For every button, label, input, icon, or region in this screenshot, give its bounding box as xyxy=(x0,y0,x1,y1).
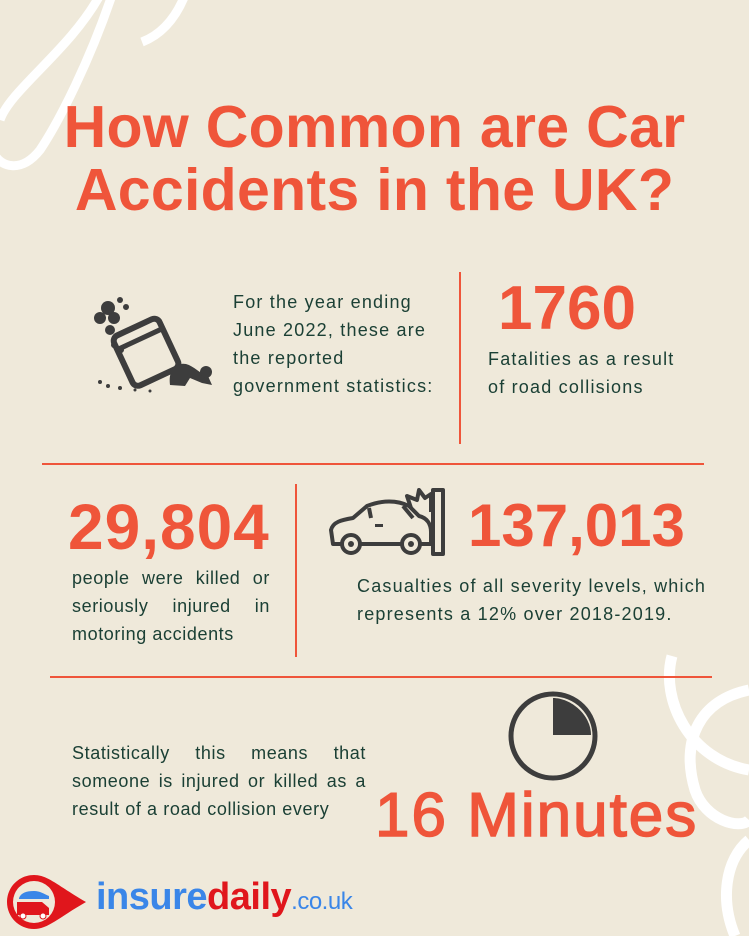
icon: car crashing into wall xyxy=(329,488,445,556)
stat: 29,804 KSI: seriously injured in xyxy=(72,596,270,616)
stat: 29,804 KSI: motoring accidents xyxy=(72,624,234,644)
text: statistically: Statistically this means that xyxy=(72,743,366,763)
text: statistically: someone is injured or killed as a xyxy=(72,771,366,791)
logo: insuredaily: insuredaily.co.uk xyxy=(96,876,352,918)
text: casualties: Casualties of all severity levels, which xyxy=(357,576,706,596)
text: intro xyxy=(233,292,433,396)
stat: 29,804 KSI: 29,804 xyxy=(68,491,270,563)
stat: 1760 fatalities xyxy=(488,274,674,397)
stat: 29,804 KSI xyxy=(68,491,270,644)
title xyxy=(64,94,685,223)
stat: 16 Minutes: 16 Minutes xyxy=(375,781,698,850)
text: casualties xyxy=(357,576,706,624)
stat: 137,013 casualties: 137,013 xyxy=(468,492,685,559)
title: Accidents in the UK? xyxy=(75,157,674,223)
text: statistically xyxy=(72,743,366,819)
title: How Common are Car xyxy=(64,94,685,160)
text: intro: the reported xyxy=(233,348,344,368)
text: intro: June 2022, these are xyxy=(233,320,426,340)
stat: 1760 fatalities: of road collisions xyxy=(488,377,644,397)
text: intro: For the year ending xyxy=(233,292,412,312)
icon: clock xyxy=(508,692,598,780)
text: intro: government statistics: xyxy=(233,376,433,396)
logo: insuredaily xyxy=(7,875,353,929)
stat: 1760 fatalities: 1760 xyxy=(498,274,636,343)
text: statistically: result of a road collision every xyxy=(72,799,329,819)
stat: 1760 fatalities: Fatalities as a result xyxy=(488,349,674,369)
stat: 29,804 KSI: people were killed or xyxy=(72,568,270,588)
text: casualties: represents a 12% over 2018-2019. xyxy=(357,604,673,624)
icon: overturned car crash xyxy=(94,297,212,392)
